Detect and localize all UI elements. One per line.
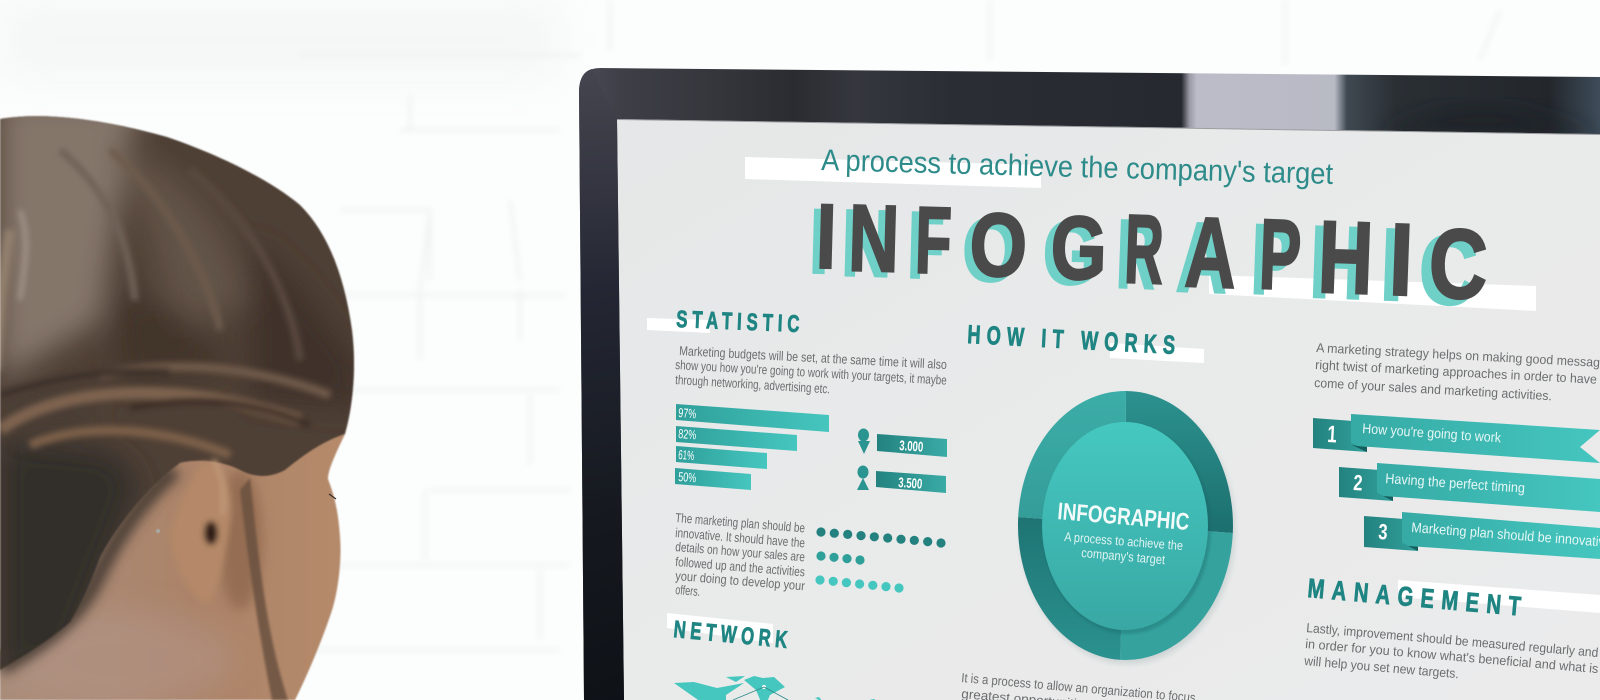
statistic paragraph: show you how you're going to work with your targets, it maybe bbox=[675, 357, 947, 388]
title dark letters: O bbox=[968, 195, 1028, 296]
title dark letters: F bbox=[914, 186, 953, 294]
ribbon 3: 3 bbox=[1378, 520, 1388, 545]
title shadow letters: I bbox=[808, 190, 831, 293]
strategy paragraph bbox=[1314, 340, 1600, 403]
donut center text: company's target bbox=[1081, 545, 1166, 567]
statistic paragraph bbox=[675, 343, 947, 396]
donut center text bbox=[1058, 502, 1189, 566]
gender stat 3.500: 3.500 bbox=[898, 474, 923, 492]
marketing plan paragraph: offers. bbox=[675, 582, 701, 599]
bar chart: 82% bbox=[678, 426, 697, 442]
bar chart bbox=[675, 404, 829, 490]
title shadow letters: I bbox=[1378, 207, 1406, 323]
bar chart: 97% bbox=[678, 405, 697, 421]
world map with connections bbox=[674, 676, 878, 700]
title dark letters: I bbox=[815, 185, 838, 288]
marketing plan paragraph: details on how your sales are bbox=[675, 539, 806, 564]
panel: statistic bbox=[647, 306, 947, 599]
statistic paragraph: through networking, advertising etc. bbox=[675, 372, 830, 396]
title dark letters bbox=[819, 204, 1486, 300]
ribbon 3 bbox=[1364, 512, 1600, 559]
gender stat 3.000: 3.000 bbox=[899, 437, 924, 455]
title shadow letters: F bbox=[906, 191, 946, 299]
heading: network: NETWORK bbox=[672, 616, 789, 654]
title shadow letters: O bbox=[961, 200, 1021, 301]
bar chart: 61% bbox=[678, 447, 695, 463]
dot rows bbox=[815, 527, 946, 593]
donut center text: A process to achieve the bbox=[1064, 529, 1184, 553]
title dark letters: H bbox=[1316, 200, 1375, 317]
title dark letters: I bbox=[1387, 202, 1415, 318]
eyelash bbox=[329, 494, 336, 499]
ribbon 1: How you're going to work bbox=[1362, 420, 1502, 446]
ear bbox=[170, 460, 232, 603]
title shadow letters: A bbox=[1175, 201, 1230, 315]
heading: management: MANAGEMENT bbox=[1306, 573, 1522, 622]
management paragraph: in order for you to know what's beneficial and what is bbox=[1305, 636, 1599, 676]
person in foreground bbox=[0, 100, 370, 700]
title shadow letters: G bbox=[1041, 203, 1100, 305]
gender stat 3.000 bbox=[858, 428, 947, 457]
hair bbox=[0, 100, 370, 690]
bar chart: 50% bbox=[678, 469, 697, 485]
title strip and subtitle: A process to achieve the company's target bbox=[821, 144, 1334, 191]
marketing plan paragraph: followed up and the activities bbox=[675, 554, 806, 579]
title strip and subtitle bbox=[745, 150, 1333, 190]
title shadow letters bbox=[812, 208, 1476, 306]
marketing plan paragraph bbox=[675, 510, 806, 599]
panel: how it works bbox=[961, 320, 1235, 700]
management paragraph bbox=[1303, 620, 1599, 681]
ribbon 2: Having the perfect timing bbox=[1385, 470, 1526, 496]
title dark letters: G bbox=[1049, 198, 1108, 300]
marketing plan paragraph: your doing to develop your bbox=[675, 568, 806, 593]
management paragraph: will help you set new targets. bbox=[1303, 653, 1459, 681]
statistic paragraph: Marketing budgets will be set, at the same time it will also bbox=[679, 343, 947, 372]
donut center text: INFOGRAPHIC bbox=[1056, 498, 1190, 536]
title dark letters: C bbox=[1427, 208, 1489, 321]
ribbon 1: 1 bbox=[1327, 421, 1337, 448]
monitor bezel bbox=[579, 68, 1600, 700]
earring bbox=[156, 529, 160, 533]
title shadow letters: H bbox=[1308, 205, 1367, 322]
title dark letters: R bbox=[1123, 193, 1166, 305]
marketing plan paragraph: The marketing plan should be bbox=[675, 510, 806, 535]
donut chart bbox=[1018, 391, 1235, 664]
title dark letters: N bbox=[847, 184, 901, 292]
title shadow letters: P bbox=[1249, 202, 1295, 316]
title shadow letters: C bbox=[1417, 214, 1479, 327]
strategy paragraph: come of your sales and marketing activities. bbox=[1314, 375, 1552, 403]
main title INFOGRAPHIC bbox=[808, 184, 1536, 327]
face and neck bbox=[0, 430, 345, 700]
title dark letters: P bbox=[1257, 197, 1303, 311]
ribbon 1 bbox=[1313, 414, 1600, 463]
panel: marketing strategy bbox=[1313, 340, 1600, 559]
panel: management bbox=[1303, 573, 1600, 681]
loose hair strand bbox=[240, 478, 288, 700]
title dark letters: A bbox=[1183, 196, 1238, 310]
heading: statistic: STATISTIC bbox=[676, 306, 800, 338]
title shadow letters: N bbox=[840, 189, 894, 297]
soft hairline on the neck bbox=[0, 470, 175, 668]
marketing plan paragraph: innovative. It should have the bbox=[675, 525, 806, 550]
ribbon 2 bbox=[1339, 463, 1600, 512]
monitor screen with infographic bbox=[617, 118, 1600, 700]
ribbon 2: 2 bbox=[1353, 471, 1363, 496]
heading: how it works: HOW IT WORKS bbox=[967, 320, 1176, 360]
panel: network bbox=[667, 613, 878, 700]
gender stat 3.500 bbox=[857, 466, 946, 493]
title shadow letters: R bbox=[1115, 198, 1158, 310]
